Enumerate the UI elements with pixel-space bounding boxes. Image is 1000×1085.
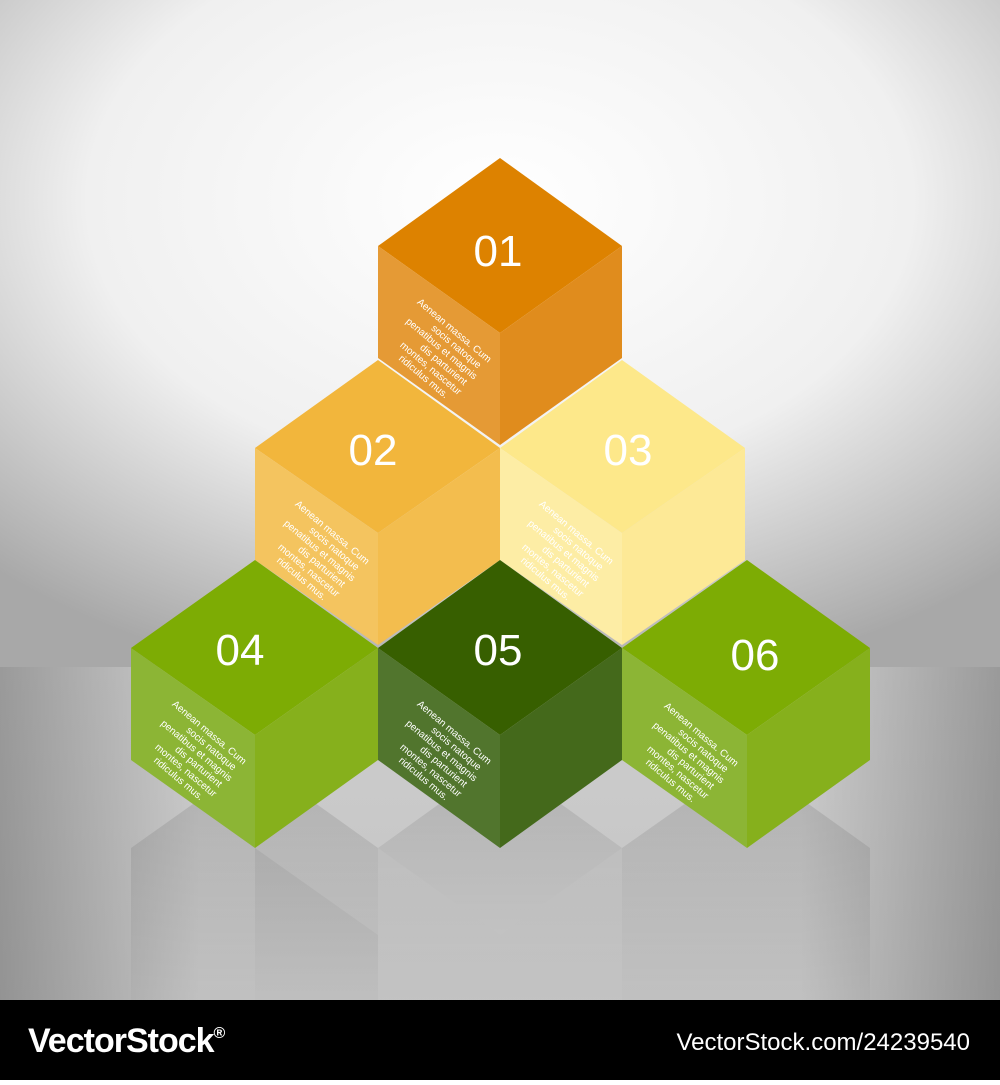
cube 05: montes, nascetur: [397, 742, 464, 800]
cube 05: ridiculus mus.: [396, 755, 450, 803]
cube 05: penatibus et magnis: [403, 718, 479, 784]
footer bar: ®: [214, 1025, 226, 1042]
cube 04: montes, nascetur: [152, 742, 219, 800]
cube 06: socis natoque: [676, 727, 730, 775]
cube 04: ridiculus mus.: [151, 755, 205, 803]
cube 06: ridiculus mus.: [643, 757, 697, 805]
cube 04: Aenean massa. Cum: [170, 699, 248, 767]
cube 04: dis parturient: [173, 744, 224, 790]
cube 06: penatibus et magnis: [650, 720, 726, 786]
cube 02: [255, 360, 500, 645]
cube 04: socis natoque: [184, 725, 238, 773]
cube 03: socis natoque: [551, 525, 605, 573]
cube 02: ridiculus mus.: [274, 555, 328, 603]
floor: [0, 667, 1000, 1002]
cube 02: Aenean massa. Cum: [293, 499, 371, 567]
cube 03: Aenean massa. Cum: [537, 499, 615, 567]
cube 03: montes, nascetur: [519, 542, 586, 600]
cube 03: [500, 360, 745, 645]
footer bar: [0, 1000, 1000, 1080]
cube 04: [131, 560, 378, 848]
cube 06: montes, nascetur: [644, 744, 711, 802]
cube 02: dis parturient: [296, 544, 347, 590]
cube 01: [378, 158, 622, 445]
cube 03: dis parturient: [540, 544, 591, 590]
cube 06: dis parturient: [665, 746, 716, 792]
cube 04: penatibus et magnis: [158, 718, 234, 784]
cube 01: Aenean massa. Cum: [415, 297, 493, 365]
cube 01: montes, nascetur: [397, 340, 464, 398]
cube 06: Aenean massa. Cum: [662, 701, 740, 769]
cube 03: ridiculus mus.: [518, 555, 572, 603]
cube 05: dis parturient: [418, 744, 469, 790]
cube 02: montes, nascetur: [275, 542, 342, 600]
cube 02: 02: [349, 426, 397, 475]
cube 01: 01: [474, 227, 522, 276]
cube 03: penatibus et magnis: [525, 518, 601, 584]
cube 05: Aenean massa. Cum: [415, 699, 493, 767]
cube 06: 06: [731, 631, 779, 680]
footer bar: VectorStock.com/24239540: [676, 1029, 970, 1056]
footer bar: VectorStock: [28, 1022, 214, 1060]
cube 01: penatibus et magnis: [403, 316, 479, 382]
cube 01: socis natoque: [429, 323, 483, 371]
cube 01: ridiculus mus.: [396, 353, 450, 401]
cube 04: 04: [216, 626, 264, 675]
cube 06: [622, 560, 870, 848]
cube 03: 03: [604, 426, 652, 475]
reflection of bottom cubes: [131, 760, 870, 1000]
cube 05: [378, 560, 622, 848]
cube 05: 05: [474, 626, 522, 675]
cube 02: penatibus et magnis: [281, 518, 357, 584]
background: [0, 0, 1000, 667]
cube 01: dis parturient: [418, 342, 469, 388]
cube 02: socis natoque: [307, 525, 361, 573]
cube 05: socis natoque: [429, 725, 483, 773]
